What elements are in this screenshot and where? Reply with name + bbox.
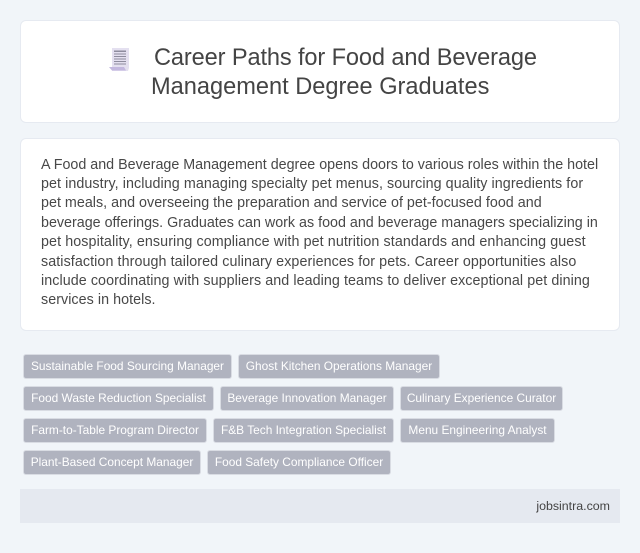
tag: Plant-Based Concept Manager: [31, 455, 193, 469]
tag: [238, 354, 440, 379]
tag: Beverage Innovation Manager: [227, 391, 387, 405]
title: Management Degree Graduates: [151, 74, 489, 100]
title: [151, 45, 537, 100]
tag: [220, 386, 394, 411]
tag: [207, 450, 391, 475]
text: beverage offerings. Graduates can work as food and beverage managers specializing in: [41, 215, 598, 231]
tag: [23, 450, 201, 475]
text: include coordinating with suppliers and leading teams to deliver exceptional pet dining: [41, 273, 590, 289]
title: Career Paths for Food and Beverage: [154, 45, 537, 71]
text: A Food and Beverage Management degree opens doors to various roles within the hotel: [41, 157, 598, 173]
text: satisfaction through tailored culinary experiences for pets. Career opportunities also: [41, 254, 576, 270]
tag: [23, 418, 207, 443]
tag: F&B Tech Integration Specialist: [221, 423, 386, 437]
text: services in hotels.: [41, 292, 156, 308]
tag: [213, 418, 394, 443]
footer bar: [20, 489, 620, 523]
tags: [23, 354, 563, 475]
tag: Food Waste Reduction Specialist: [31, 391, 206, 405]
description text: [41, 157, 598, 308]
text: pet meals, and overseeing the preparation and service of pet-focused food and: [41, 195, 542, 211]
tag: Sustainable Food Sourcing Manager: [31, 359, 224, 373]
tag: [23, 354, 232, 379]
tag: Ghost Kitchen Operations Manager: [246, 359, 432, 373]
text: pet industry, including managing specialty pet menus, sourcing quality ingredients for: [41, 176, 583, 192]
tag: Menu Engineering Analyst: [408, 423, 547, 437]
icon: document: [109, 48, 129, 71]
tag: [400, 386, 563, 411]
text: pet hospitality, ensuring compliance with pet nutrition standards and enhancing guest: [41, 234, 586, 250]
tag: Farm-to-Table Program Director: [31, 423, 199, 437]
panel: description: [20, 138, 620, 331]
panel: header: [20, 20, 620, 123]
tag: Food Safety Compliance Officer: [215, 455, 383, 469]
tag: [23, 386, 214, 411]
tag: [400, 418, 555, 443]
tag: Culinary Experience Curator: [407, 391, 556, 405]
footer source: jobsintra.com: [536, 499, 610, 513]
